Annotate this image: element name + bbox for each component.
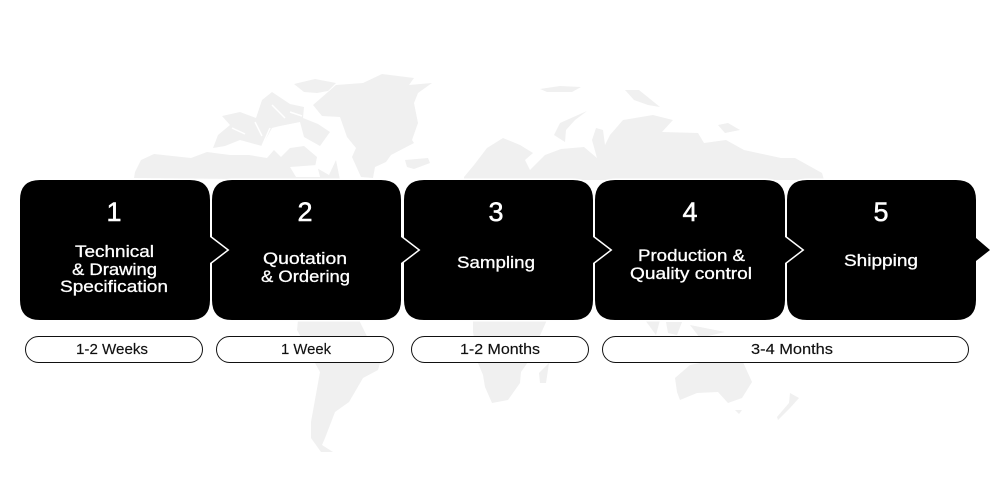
world map background: [134, 74, 824, 452]
step 4: production and quality control: [595, 180, 802, 320]
step 2: quotation and ordering: Quotation: [263, 249, 347, 268]
step 1: technical and drawing specification: [20, 180, 227, 320]
step 3: sampling: 3: [488, 197, 504, 227]
duration pill: 1-2 weeks: 1-2 Weeks: [76, 342, 148, 358]
duration pill: 3-4 months: 3-4 Months: [751, 342, 833, 358]
step 1: technical and drawing specification: 1: [106, 197, 122, 227]
step 5: shipping: [787, 180, 990, 320]
duration pill: 1-2 weeks: [26, 336, 202, 362]
step 4: production and quality control: Quality control: [630, 264, 752, 283]
duration pill: 1 week: 1 Week: [281, 342, 332, 358]
step 3: sampling: Sampling: [457, 253, 535, 272]
duration pill: 1-2 months: 1-2 Months: [460, 342, 540, 358]
step 1: technical and drawing specification: & Drawing: [72, 260, 157, 279]
duration pill: 1-2 months: [412, 336, 588, 362]
step 2: quotation and ordering: [212, 180, 418, 320]
step 2: quotation and ordering: & Ordering: [261, 267, 350, 286]
duration pill: 3-4 months: [602, 336, 968, 362]
step 2: quotation and ordering: 2: [297, 197, 313, 227]
step 1: technical and drawing specification: Specification: [60, 277, 168, 296]
step 4: production and quality control: 4: [682, 197, 698, 227]
duration pill: 1 week: [216, 336, 394, 362]
step 3: sampling: [404, 180, 610, 320]
step 1: technical and drawing specification: Technical: [75, 242, 154, 261]
step 5: shipping: Shipping: [844, 251, 918, 270]
step 5: shipping: 5: [873, 197, 889, 227]
step 4: production and quality control: Production &: [638, 246, 746, 265]
